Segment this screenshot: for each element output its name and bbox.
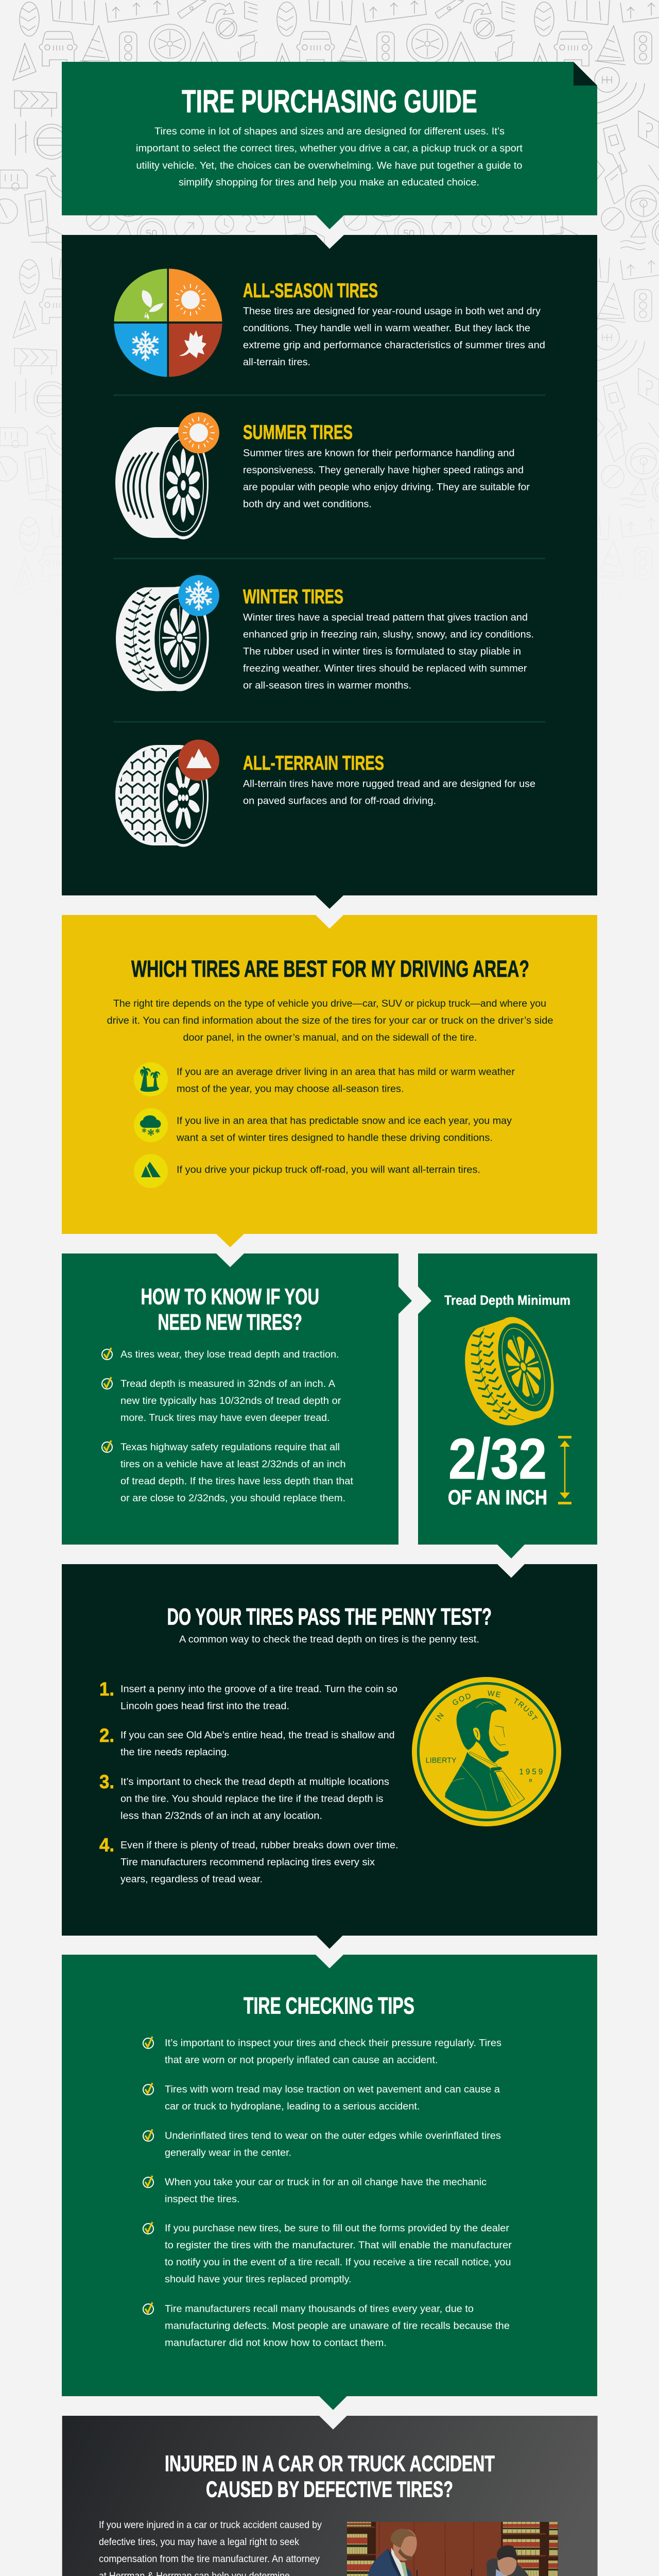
tip 6: Tire manufacturers recall many thousands of tires every year, due to [165, 2304, 474, 2314]
bullet: tread loss: As tires wear, they lose tread depth and traction. [120, 1349, 339, 1360]
icon: winter tire [116, 586, 209, 691]
tip 5: to notify you in the event of a tire recall. If you receive a tire recall notice, you [165, 2257, 511, 2268]
text: winter tires: The rubber used in winter tires is formulated to stay pliable in [243, 646, 521, 657]
panel: legal help [62, 2416, 598, 2576]
step 2: If you can see Old Abe’s entire head, the tread is shallow and [120, 1730, 394, 1741]
tip 6: manufacturer did not know how to contact them. [165, 2338, 387, 2348]
doodle road icon pattern [0, 0, 659, 618]
text: winter tires: enhanced grip in freezing rain, slushy, snowy, and icy conditions. [243, 630, 534, 640]
text: all-terrain tires: on paved surfaces and for off-road driving. [243, 795, 436, 807]
step 3: It’s important to check the tread depth at multiple locations [120, 1776, 389, 1788]
step 4: years, regardless of tread wear. [120, 1874, 263, 1885]
step 2: the tire needs replacing. [120, 1747, 230, 1758]
tip 4 [143, 2176, 487, 2205]
step 1: Insert a penny into the groove of a tire tread. Turn the coin so [120, 1684, 397, 1695]
panel: checking tips [62, 1955, 597, 2410]
text: winter tires: Winter tires have a special tread pattern that gives traction and [243, 612, 528, 623]
heading: penny test: DO YOUR TIRES PASS THE PENNY TEST? [167, 1603, 492, 1630]
panel: tire types [62, 235, 597, 909]
text: snow and ice [176, 1116, 512, 1144]
step 3: on the tire. You should replace the tire if the tread depth is [120, 1794, 383, 1804]
text: driving area intro: drive it. You can find information about the size of the tires for your car or truck on the driver’s side [107, 1015, 553, 1026]
tip 5: to register the tires with the manufacturer. That will enable the manufacturer [165, 2240, 512, 2251]
photo: attorneys [347, 2522, 558, 2576]
heading: legal help: INJURED IN A CAR OR TRUCK ACCIDENT [165, 2451, 495, 2476]
icon: mountains [134, 1154, 168, 1188]
text: summer tires [243, 448, 530, 510]
step 4: 4. [99, 1834, 114, 1856]
intro text: utility vehicle. Yet, the choices can be overwhelming. We have put together a guide to [136, 161, 522, 171]
intro text: simplify shopping for tires and help you make an educated choice. [179, 177, 479, 188]
figure: 2/32: 2/32 [448, 1427, 547, 1491]
icon: all-terrain badge [178, 740, 219, 781]
bullet: Texas rules: or are close to 2/32nds, you should replace them. [120, 1493, 345, 1504]
tip 6 [143, 2302, 510, 2348]
heading: legal help: CAUSED BY DEFECTIVE TIRES? [206, 2477, 453, 2502]
icon: penny: IN [435, 1713, 444, 1722]
text: legal help: If you were injured in a car or truck accident caused by [99, 2520, 322, 2531]
step 1 [99, 1679, 397, 1711]
step 3 [99, 1771, 389, 1822]
icon: summer tire [115, 427, 209, 539]
icon: penny: LIBERTY [426, 1757, 457, 1765]
heading: summer tires: SUMMER TIRES [243, 421, 353, 444]
bullet: Texas rules: tires on a vehicle have at least 2/32nds of an inch [120, 1459, 346, 1470]
text: winter tires: or all-season tires in warmer months. [243, 680, 411, 691]
intro text: important to select the correct tires, whether you drive a car, a pickup truck or a sport [136, 143, 523, 154]
text: warm weather [177, 1066, 515, 1094]
bullet: Texas rules: of tread depth. If the tires have less depth than that [120, 1476, 354, 1487]
heading: legal help [165, 2451, 495, 2502]
label: of an inch: OF AN INCH [448, 1486, 547, 1509]
text: all-season tires [243, 306, 545, 368]
text: legal help: defective tires, you may have a legal right to seek [99, 2537, 299, 2548]
intro text [136, 126, 523, 188]
text: snow and ice: want a set of winter tires designed to handle these driving conditions. [176, 1132, 493, 1144]
icon: four seasons circle [113, 268, 223, 378]
step 3: 3. [99, 1771, 114, 1792]
bullet: tread measure: more. Truck tires may have even deeper tread. [120, 1413, 330, 1423]
text: driving area intro: door panel, in the owner’s manual, and on the sidewall of the tire. [183, 1032, 477, 1043]
icon: penny: TRUST [514, 1698, 537, 1720]
heading: all-terrain tires: ALL-TERRAIN TIRES [243, 752, 384, 774]
icon: summer badge [178, 412, 219, 453]
text: all-terrain tires: All-terrain tires have more rugged tread and are designed for use [243, 779, 535, 789]
tip 4: When you take your car or truck in for an oil change have the mechanic [165, 2177, 487, 2188]
tip 3 [143, 2129, 501, 2159]
icon: depth arrow [558, 1436, 571, 1504]
title: TIRE PURCHASING GUIDE [182, 84, 477, 120]
text: summer tires: Summer tires are known for their performance handling and [243, 448, 515, 459]
icon: penny: D [529, 1778, 532, 1783]
tip 5 [143, 2222, 512, 2285]
panel: intro [62, 62, 597, 229]
bullet: tread measure [102, 1377, 341, 1423]
tip 5: should have your tires replaced promptly. [165, 2274, 351, 2285]
bullet: Texas rules [102, 1440, 354, 1504]
bullet: Texas rules: Texas highway safety regulations require that all [120, 1442, 340, 1453]
step 4: Even if there is plenty of tread, rubber breaks down over time. [120, 1840, 398, 1851]
tip 5: If you purchase new tires, be sure to fill out the forms provided by the dealer [165, 2223, 510, 2234]
panel: penny test [62, 1564, 597, 1948]
text: all-season tires: extreme grip and performance characteristics of summer tires and [243, 340, 545, 351]
icon: penny: WE [488, 1690, 501, 1698]
step 1: Lincoln goes head first into the tread. [120, 1701, 289, 1711]
text: driving area intro [107, 998, 553, 1043]
text: snow and ice: If you live in an area that has predictable snow and ice each year, you may [177, 1116, 512, 1126]
text: all-season tires: These tires are designed for year-round usage in both wet and dry [243, 306, 541, 317]
tip 4: inspect the tires. [165, 2194, 240, 2205]
panel: driving area [62, 915, 597, 1247]
heading: winter tires: WINTER TIRES [243, 586, 343, 608]
icon: all-terrain tire [115, 745, 209, 847]
text: all-season tires: conditions. They handle well in warm weather. But they lack the [243, 323, 530, 334]
bullet: tread measure: Tread depth is measured in 32nds of an inch. A [120, 1379, 335, 1389]
subtitle: penny test: A common way to check the tread depth on tires is the penny test. [179, 1634, 479, 1645]
panel: tread depth [418, 1253, 597, 1558]
step 2: 2. [99, 1725, 114, 1746]
text: warm weather: most of the year, you may choose all-season tires. [177, 1084, 404, 1094]
text: winter tires: freezing weather. Winter tires should be replaced with summer [243, 664, 527, 674]
heading: new tires: HOW TO KNOW IF YOU [141, 1284, 319, 1310]
icon: penny [412, 1677, 561, 1826]
icon: gold tire [453, 1310, 565, 1435]
step 4 [99, 1834, 398, 1885]
tip 2: Tires with worn tread may lose traction on wet pavement and can cause a [165, 2084, 500, 2095]
icon: winter badge [178, 575, 219, 616]
tip 2: car or truck to hydroplane, leading to a serious accident. [165, 2101, 420, 2112]
tip 2 [143, 2083, 500, 2112]
intro text: Tires come in lot of shapes and sizes and are designed for different uses. It’s [154, 126, 505, 137]
heading: tread depth: Tread Depth Minimum [444, 1292, 570, 1308]
text: off-road: If you drive your pickup truck off-road, you will want all-terrain tires. [177, 1164, 480, 1176]
tip 3: Underinflated tires tend to wear on the outer edges while overinflated tires [165, 2131, 501, 2141]
heading: new tires: NEED NEW TIRES? [158, 1310, 302, 1335]
text: summer tires: are popular with people who enjoy driving. They are suitable for [243, 482, 530, 493]
step 3: less than 2/32nds of an inch at any location. [120, 1810, 322, 1822]
text: warm weather: If you are an average driver living in an area that has mild or warm weather [177, 1066, 515, 1078]
bullet: tread measure: new tire typically has 10/32nds of tread depth or [120, 1396, 341, 1406]
text: legal help [98, 2520, 322, 2576]
panel: new tires [62, 1253, 412, 1545]
text: all-terrain tires [243, 779, 535, 807]
step 2 [99, 1725, 394, 1758]
text: summer tires: both dry and wet conditions. [243, 499, 372, 510]
heading: new tires [141, 1284, 319, 1335]
text: summer tires: responsiveness. They generally have higher speed ratings and [243, 465, 524, 476]
heading: checking tips: TIRE CHECKING TIPS [244, 1993, 414, 2019]
tip 1 [143, 2037, 501, 2066]
text: legal help: compensation from the tire manufacturer. An attorney [99, 2554, 320, 2565]
tip 6: manufacturing defects. Most people are unaware of tire recalls because the [165, 2320, 510, 2332]
tip 1: It’s important to inspect your tires and check their pressure regularly. Tires [165, 2038, 501, 2048]
text: winter tires [243, 612, 534, 691]
icon: palm trees [134, 1062, 168, 1096]
tip 1: that are worn or not properly inflated can cause an accident. [165, 2055, 438, 2066]
icon: snow cloud [134, 1108, 168, 1142]
tip 3: generally wear in the center. [165, 2147, 291, 2159]
step 4: Tire manufacturers recommend replacing tires every six [120, 1857, 375, 1868]
text: driving area intro: The right tire depends on the type of vehicle you drive—car, SUV or pickup truck—and where you [113, 998, 546, 1009]
icon: penny: 1959 [519, 1768, 543, 1776]
icon: penny: GOD [453, 1694, 471, 1705]
heading: all-season tires: ALL-SEASON TIRES [243, 280, 378, 302]
step 1: 1. [99, 1679, 114, 1700]
text: all-season tires: all-terrain tires. [243, 357, 310, 368]
